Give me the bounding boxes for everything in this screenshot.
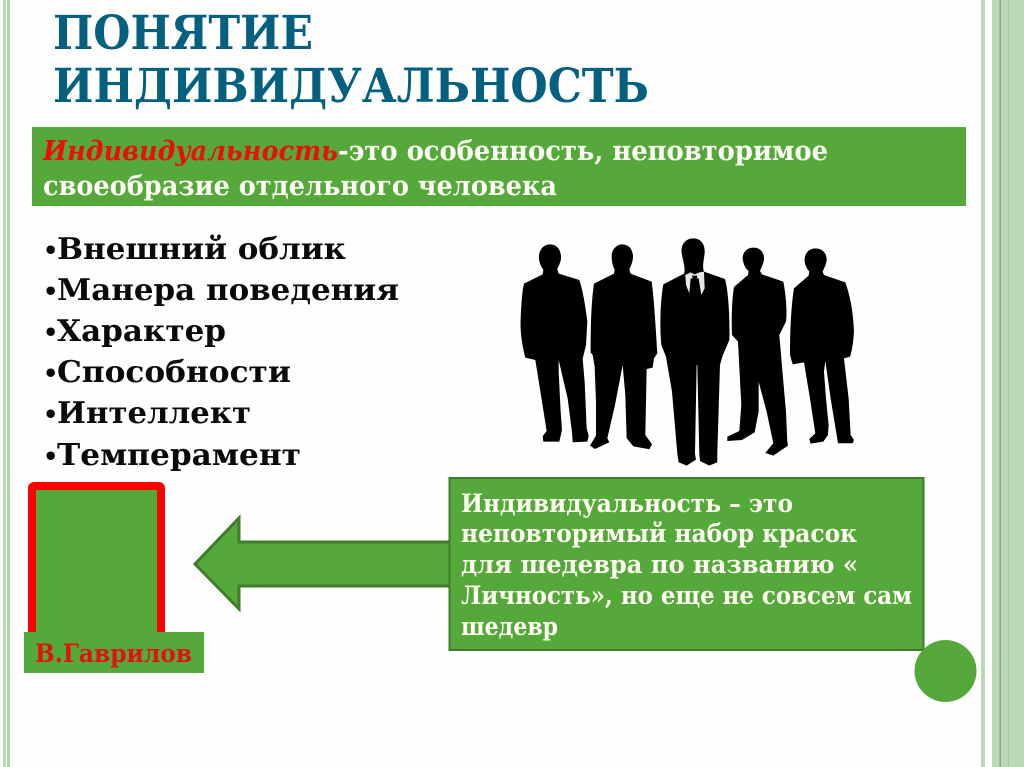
panel: definition: [32, 127, 966, 206]
callout: masterpiece metaphor: Индивидуальность – это: [461, 489, 793, 518]
portrait frame: [32, 486, 161, 646]
callout: masterpiece metaphor: для шедевра по названию «: [461, 550, 858, 579]
title: ИНДИВИДУАЛЬНОСТЬ: [53, 59, 649, 114]
bullet list of traits: Манера поведения: [57, 273, 399, 308]
bullet list of traits: •: [43, 277, 58, 306]
bullet list of traits: Внешний облик: [57, 232, 346, 267]
callout: masterpiece metaphor: шедевр: [461, 612, 558, 641]
man 2: [590, 244, 657, 449]
decorative green circle: [914, 640, 976, 702]
definition term: Индивидуальность: [42, 136, 338, 167]
callout: masterpiece metaphor: неповторимый набор красок: [461, 519, 857, 548]
definition text line 1: -это особенность, неповторимое: [338, 136, 828, 167]
arrow pointing left: [195, 518, 451, 609]
man 3 shirt collar: [685, 272, 705, 295]
bullet list of traits: Темперамент: [57, 438, 301, 473]
bullet list of traits: •: [43, 318, 58, 347]
bullet list of traits: [43, 232, 399, 473]
title: [53, 6, 649, 114]
silhouettes of five men: [521, 238, 854, 466]
man 1: [521, 244, 589, 442]
bullet list of traits: •: [43, 359, 58, 388]
title: ПОНЯТИЕ: [53, 6, 313, 61]
bullet list of traits: •: [43, 442, 58, 471]
bullet list of traits: Способности: [57, 355, 291, 390]
left decorative side stripes: [3, 0, 10, 767]
bullet list of traits: Характер: [57, 314, 226, 349]
man 4: [727, 248, 788, 456]
callout: masterpiece metaphor: Личность», но еще не совсем сам: [461, 581, 912, 610]
bullet list of traits: Интеллект: [57, 396, 251, 431]
definition text line 2: своеобразие отдельного человека: [43, 171, 557, 202]
man 5: [790, 248, 854, 444]
bullet list of traits: •: [43, 236, 58, 265]
man 3: [660, 238, 729, 466]
callout: masterpiece metaphor: [450, 478, 924, 650]
caption: author: [24, 632, 204, 673]
right decorative side stripes: [981, 0, 1024, 767]
caption: author: В.Гаврилов: [35, 639, 192, 668]
bullet list of traits: •: [43, 400, 58, 429]
man 3 tie: [690, 276, 700, 296]
